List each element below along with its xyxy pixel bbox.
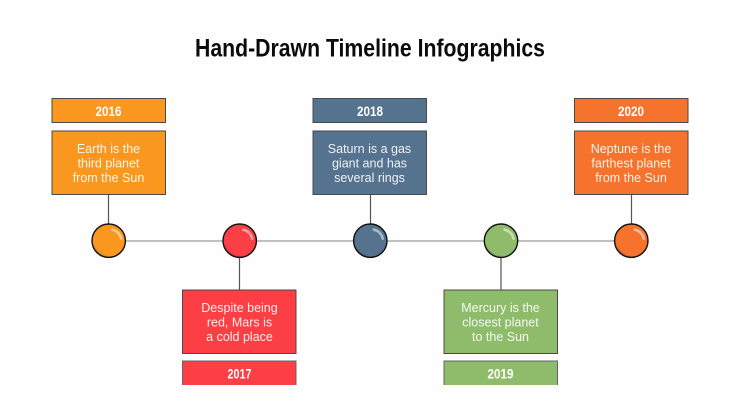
text box: Saturn: giant and has (332, 156, 407, 170)
year label 2018 (313, 98, 426, 122)
text box: Mercury: closest planet (462, 316, 539, 330)
icon: green planet (484, 224, 518, 257)
text box: Mars: a cold place (206, 330, 273, 344)
connector 2019 (500, 257, 502, 290)
text box: Earth (52, 131, 166, 194)
year label 2017: 2017 (228, 366, 252, 382)
year label 2016 (52, 98, 166, 122)
text box: Mars: red, Mars is (207, 316, 272, 330)
year label 2018: 2018 (357, 104, 383, 119)
text box: Earth: from the Sun (73, 171, 144, 185)
connector 2020 (630, 195, 632, 224)
icon: red planet (223, 224, 256, 257)
text box: Saturn: several rings (334, 171, 405, 185)
text box: Neptune: from the Sun (595, 171, 667, 185)
text box: Neptune: Neptune is the (591, 142, 671, 156)
text box: Mercury (444, 290, 558, 354)
milestone: 2016 (52, 98, 166, 257)
title: Hand-Drawn Timeline Infographics (195, 34, 545, 62)
text box: Mars (182, 290, 296, 354)
milestone: 2019 (444, 224, 558, 385)
milestone: 2020 (574, 98, 688, 257)
year label 2017 (182, 361, 296, 385)
timeline axis (108, 240, 631, 242)
icon: blue planet (354, 224, 387, 257)
text box: Earth: Earth is the (77, 142, 140, 156)
text box: Mars: Despite being (201, 301, 278, 315)
year label 2020 (574, 98, 688, 122)
text box: Saturn: Saturn is a gas (328, 142, 411, 156)
text box: Mercury: Mercury is the (461, 301, 540, 315)
year label 2019: 2019 (488, 366, 514, 382)
milestone: 2017 (182, 224, 296, 385)
year label 2020: 2020 (618, 104, 644, 119)
icon: orange-red planet (615, 224, 648, 257)
text box: Earth: third planet (78, 156, 140, 170)
year label 2016: 2016 (96, 104, 122, 119)
text box: Neptune (574, 131, 688, 194)
connector 2017 (238, 257, 240, 290)
milestone: 2018 (313, 98, 426, 257)
connector 2018 (370, 195, 372, 224)
text box: Saturn (313, 131, 426, 194)
year label 2019 (444, 361, 558, 385)
connector 2016 (108, 195, 110, 224)
icon: orange planet (92, 224, 125, 257)
text box: Neptune: farthest planet (591, 156, 671, 170)
text box: Mercury: to the Sun (472, 330, 529, 344)
